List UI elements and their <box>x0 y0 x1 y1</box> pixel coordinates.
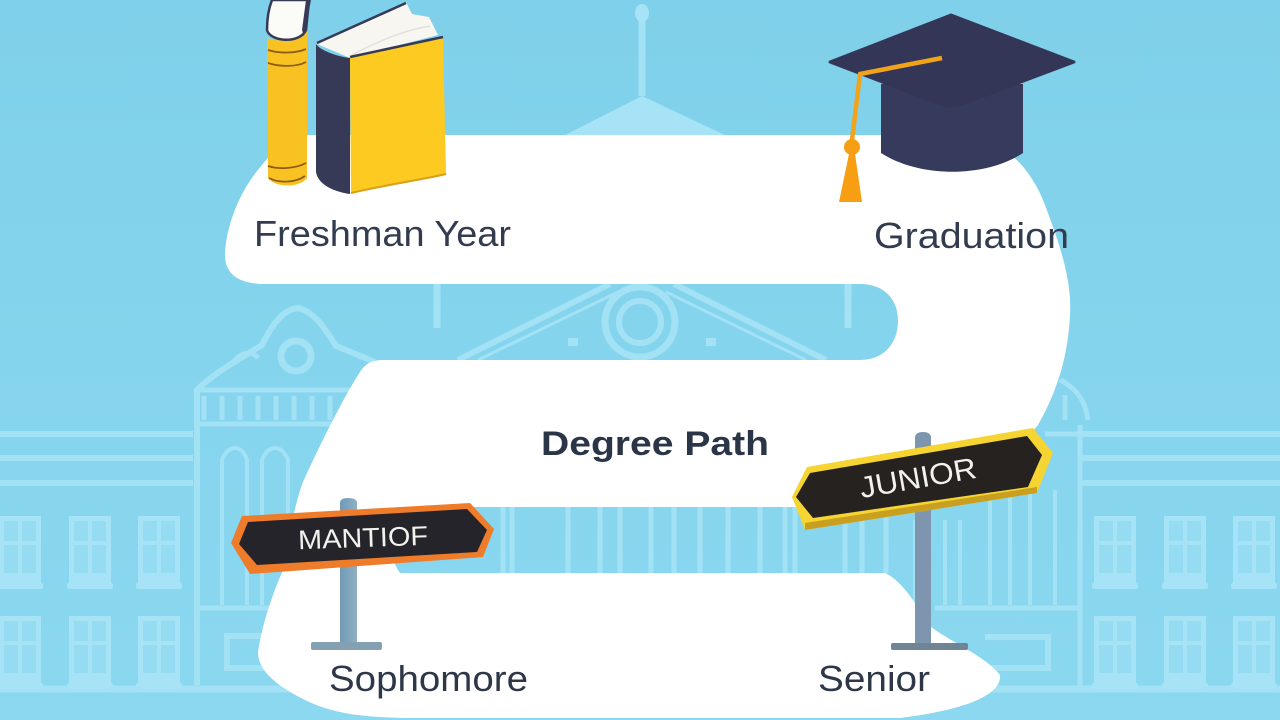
tassel cord <box>852 58 942 140</box>
label: Freshman Year: Freshman Year <box>254 213 511 254</box>
building: wing windows <box>0 517 1277 689</box>
icon: graduation cap <box>830 15 1074 202</box>
label: Sophomore: Sophomore <box>329 658 528 699</box>
signpost base <box>311 642 382 650</box>
signpost: junior <box>792 428 1053 650</box>
icon: yellow book <box>316 2 446 194</box>
building: right tower <box>915 380 1088 689</box>
building: central spire and roof <box>563 4 727 136</box>
label: Graduation: Graduation <box>874 215 1069 256</box>
building: central colonnade <box>503 507 886 573</box>
building: central pediment <box>437 284 848 360</box>
icon: standing book <box>267 0 311 186</box>
sign text: MANTIOF <box>298 521 429 555</box>
cap base <box>881 84 1023 172</box>
signpost: sophomore <box>231 498 494 650</box>
sign text: JUNIOR <box>857 452 979 505</box>
cap board <box>830 15 1074 106</box>
tassel <box>839 139 862 202</box>
building: wing cornices <box>0 434 1280 689</box>
sign board <box>792 428 1053 530</box>
signpost pole <box>915 432 931 645</box>
signpost base <box>891 643 968 650</box>
icon: stack of books <box>267 0 446 194</box>
winding white degree path <box>225 135 1070 718</box>
label: Degree Path: Degree Path <box>541 425 769 463</box>
building: left tower <box>197 308 375 685</box>
label: Senior: Senior <box>818 658 930 699</box>
signpost pole <box>340 498 357 642</box>
sign board <box>231 503 494 574</box>
